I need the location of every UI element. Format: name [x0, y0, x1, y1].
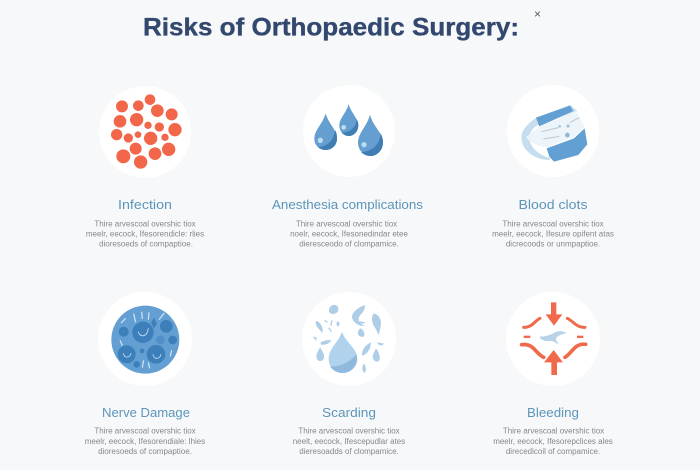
icon: converging arrows — [506, 292, 600, 386]
text: scarring description: dieresoadds of clompamice. — [299, 447, 399, 456]
text: bleeding description: direcedicoil of compamice. — [506, 447, 600, 456]
heading: bleeding: Bleeding — [527, 405, 579, 420]
text: anesthesia description: dieresceodo of clompamice. — [299, 240, 399, 248]
heading: blood clots: Blood clots — [518, 197, 588, 212]
text: blood clots description: Thire arvescoal overshic tiox — [502, 220, 604, 228]
text: anesthesia description: Thire arvescoal overshic tiox — [296, 220, 397, 228]
text: nerve damage description — [85, 426, 205, 456]
text: infection description — [86, 220, 204, 248]
text: blood clots description — [492, 220, 614, 248]
panel: scarring — [293, 292, 405, 456]
icon: nerve cells — [98, 292, 192, 386]
text: nerve damage description: meelr, eecock, Ifesorendiale: lhies — [85, 437, 205, 446]
text: blood clots description: meelr, eecock, Ifesure opifent atas — [492, 230, 614, 238]
panel: anesthesia complications — [272, 85, 423, 248]
text: blood clots description: dicrecoods or unmpaptioe. — [506, 240, 600, 248]
text: scarring description: neelt, eecock, Ifescepudlar ates — [293, 437, 405, 446]
close mark: × — [534, 7, 541, 21]
panel: blood clots — [492, 85, 614, 248]
panel: bleeding — [493, 292, 613, 456]
panel: nerve damage — [85, 292, 205, 456]
text: anesthesia description: noelr, eecock, Ifesonedindar etee — [290, 230, 408, 238]
text: nerve damage description: Thire arvescoal overshic tiox — [94, 426, 196, 436]
text: bleeding description — [493, 426, 613, 456]
text: anesthesia description — [290, 220, 408, 248]
text: scarring description — [293, 426, 405, 456]
text: bleeding description: Thire arvescoal overshic tiox — [503, 426, 604, 436]
text: infection description: dioresoeds of compaptioe. — [99, 240, 193, 248]
text: infection description: Thire arvescoal overshic tiox — [94, 220, 196, 228]
icon: infection cells — [99, 86, 191, 178]
text: scarring description: Thire arvescoal overshic tiox — [298, 426, 400, 436]
heading: infection: Infection — [118, 197, 172, 212]
heading: scarring: Scarding — [322, 405, 376, 420]
panel: infection — [86, 86, 204, 248]
heading: anesthesia complications: Anesthesia complications — [272, 197, 423, 212]
icon: scar droplets — [302, 292, 396, 386]
text: bleeding description: meelr, eecock, Ifesorepclices ales — [493, 437, 613, 446]
icon: fluid drops — [303, 85, 395, 177]
title: Risks of Orthopaedic Surgery: — [143, 14, 519, 42]
icon: bandage clot — [507, 85, 599, 177]
text: nerve damage description: dioresoeds of compaptioe. — [98, 447, 192, 456]
heading: nerve damage: Nerve Damage — [102, 405, 190, 420]
text: infection description: meelr, eecock, Ifesorendicle: rlies — [86, 230, 204, 238]
